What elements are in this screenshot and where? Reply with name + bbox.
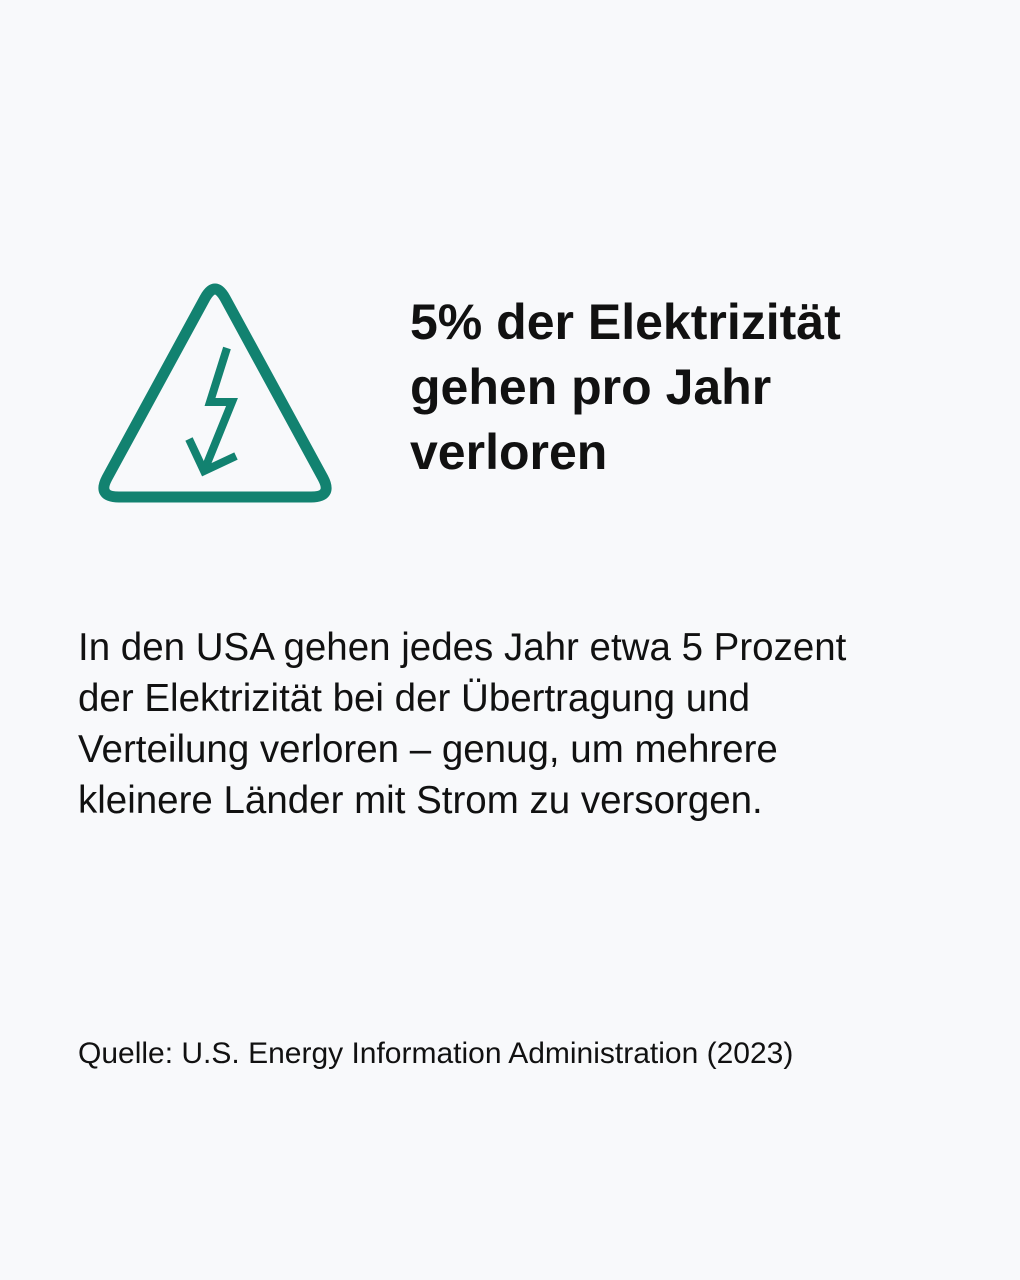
source note: Quelle: U.S. Energy Information Administration (2023)	[78, 1037, 793, 1070]
icon: warning triangle with lightning bolt	[98, 284, 332, 502]
title: verloren	[410, 424, 607, 480]
body text: kleinere Länder mit Strom zu versorgen.	[78, 779, 763, 822]
body text: der Elektrizität bei der Übertragung und	[78, 677, 750, 720]
title: gehen pro Jahr	[410, 359, 771, 415]
title: 5% der Elektrizität	[410, 294, 841, 350]
body text: In den USA gehen jedes Jahr etwa 5 Prozent	[78, 626, 846, 669]
body text: Verteilung verloren – genug, um mehrere	[78, 728, 778, 771]
body text	[78, 626, 846, 822]
title	[410, 294, 841, 480]
